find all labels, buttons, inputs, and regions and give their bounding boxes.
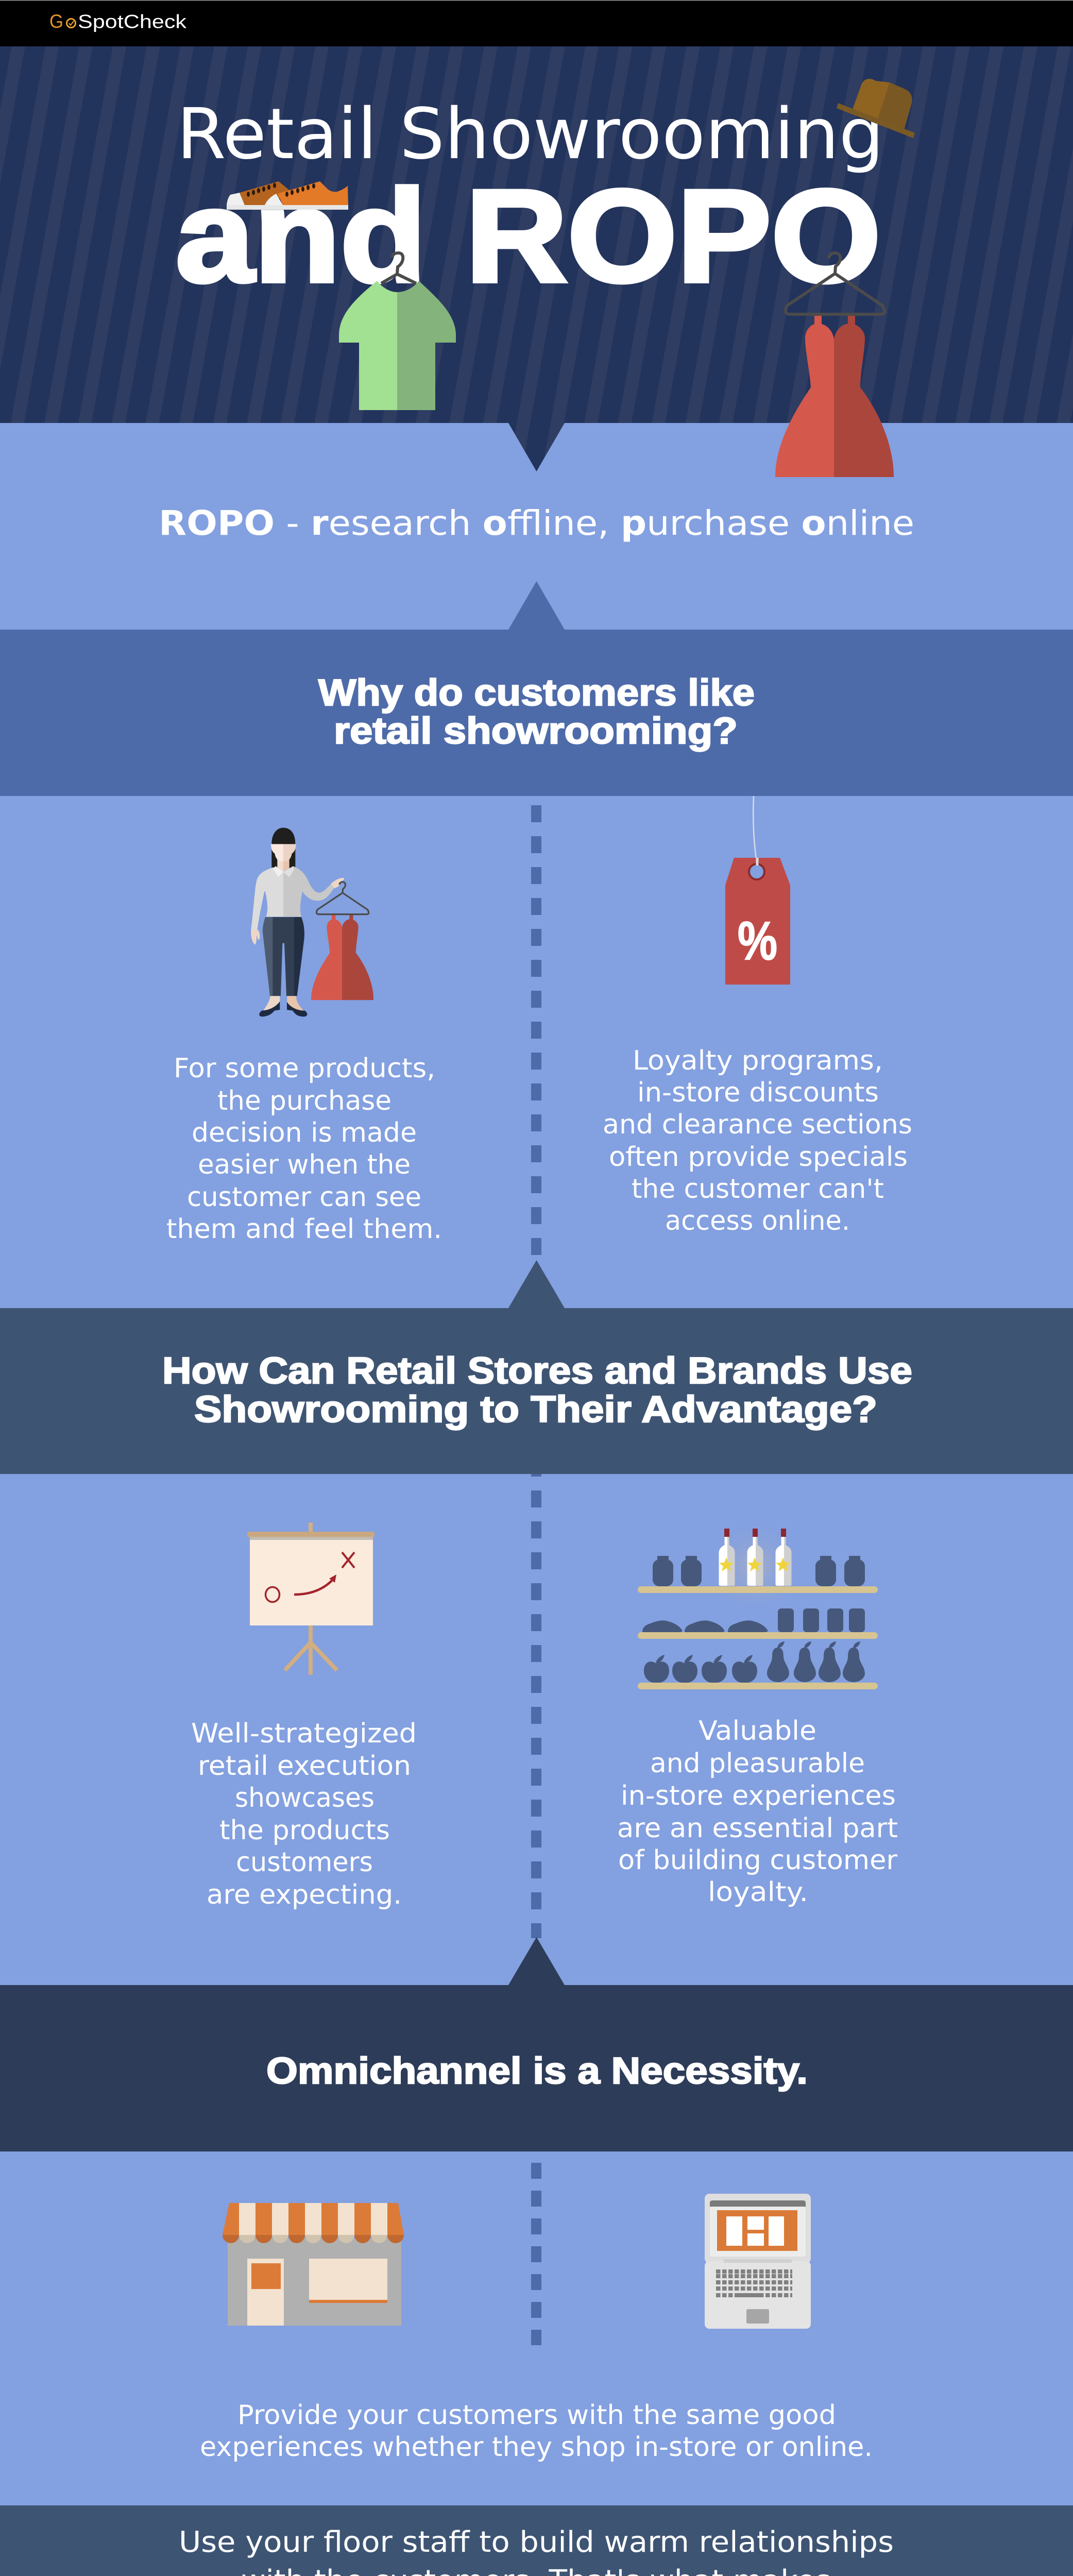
heading: why do customers like retail showrooming — [318, 672, 755, 752]
panel: how stores can use showrooming — [0, 1474, 1073, 1985]
heading: how can retail stores and brands: How Can Retail Stores and Brands Use — [162, 1350, 912, 1392]
text: valuable in-store experiences: Valuable — [699, 1716, 816, 1747]
text: for some products — [166, 1053, 442, 1245]
text: loyalty programs: often provide specials — [609, 1142, 908, 1173]
text: well-strategized retail execution: Well-strategized — [191, 1718, 417, 1749]
panel: ROPO definition — [0, 423, 1073, 630]
text: well-strategized retail execution: showcases — [235, 1783, 374, 1814]
icon: strategy board — [247, 1522, 374, 1675]
text: for some products: decision is made — [192, 1117, 417, 1148]
ROPO definition text: ROPO - research offline, purchase online — [159, 503, 914, 543]
text: loyalty programs: Loyalty programs, — [633, 1045, 883, 1076]
icon: woman with dress — [251, 828, 373, 1016]
text: loyalty programs: the customer can't — [632, 1174, 884, 1205]
panel: floor staff wall — [0, 2505, 1073, 2576]
text: for some products: customer can see — [187, 1182, 421, 1213]
heading: how can retail stores and brands — [162, 1350, 912, 1430]
text: provide your customers — [200, 2400, 873, 2463]
title line two: and ROPO — [176, 163, 881, 310]
arrow: up pointer one — [508, 581, 565, 630]
text: valuable in-store experiences: and pleasurable — [650, 1748, 865, 1779]
icon: sneakers — [227, 181, 348, 210]
icon: store shelves — [638, 1517, 878, 1689]
text: provide your customers: Provide your customers with the same good — [237, 2400, 836, 2431]
text: valuable in-store experiences — [617, 1716, 898, 1908]
heading: why do customers like retail showrooming: Why do customers like — [318, 672, 755, 714]
text: for some products: them and feel them. — [166, 1214, 442, 1245]
text: valuable in-store experiences: are an essential part — [617, 1813, 898, 1844]
text: loyalty programs — [603, 1045, 912, 1236]
panel: why heading band — [0, 630, 1073, 796]
heading: why do customers like retail showrooming: retail showrooming? — [334, 710, 738, 752]
heading: how can retail stores and brands: Showrooming to Their Advantage? — [194, 1389, 877, 1430]
text: use your floor staff — [179, 2526, 894, 2576]
icon: percent price tag — [725, 796, 790, 985]
text: well-strategized retail execution: the products — [219, 1815, 390, 1846]
text: well-strategized retail execution: retail execution — [198, 1751, 411, 1782]
text: well-strategized retail execution: customers — [236, 1847, 373, 1878]
text: well-strategized retail execution: are expecting. — [207, 1879, 402, 1910]
panel: omnichannel — [0, 2151, 1073, 2505]
text: loyalty programs: access online. — [665, 1206, 850, 1236]
text: for some products: easier when the — [198, 1149, 411, 1180]
text: well-strategized retail execution — [191, 1718, 417, 1910]
panel: why customers like showrooming — [0, 796, 1073, 1308]
icon: storefront — [223, 2203, 404, 2326]
title line one: Retail Showrooming — [177, 94, 884, 175]
heading: omnichannel is a necessity: Omnichannel is a Necessity. — [266, 2050, 808, 2092]
icon: brown hat — [837, 79, 915, 138]
text: loyalty programs: in-store discounts — [637, 1077, 879, 1108]
text: provide your customers: experiences whether they shop in-store or online. — [200, 2432, 873, 2463]
top logo bar: G — [49, 11, 63, 32]
arrow: hero pointer — [508, 423, 565, 471]
panel: how can stores heading band — [0, 1308, 1073, 1474]
icon: red dress on hanger — [775, 253, 894, 477]
top logo bar — [0, 0, 1073, 46]
text: valuable in-store experiences: of building customer — [618, 1845, 898, 1876]
text: loyalty programs: and clearance sections — [603, 1109, 912, 1140]
icon: percent price tag: % — [738, 911, 777, 971]
hero striped background — [0, 46, 1073, 423]
text: use your floor staff: Use your floor staff to build warm relationships — [179, 2526, 894, 2559]
text: for some products: the purchase — [217, 1086, 391, 1116]
top logo bar: SpotCheck — [78, 11, 187, 32]
text: valuable in-store experiences: in-store experiences — [621, 1781, 896, 1811]
panel: omnichannel heading band — [0, 1985, 1073, 2151]
text: valuable in-store experiences: loyalty. — [708, 1877, 808, 1908]
icon: green t-shirt on hanger — [339, 253, 456, 410]
text: for some products: For some products, — [174, 1053, 435, 1084]
icon: laptop — [705, 2194, 811, 2329]
